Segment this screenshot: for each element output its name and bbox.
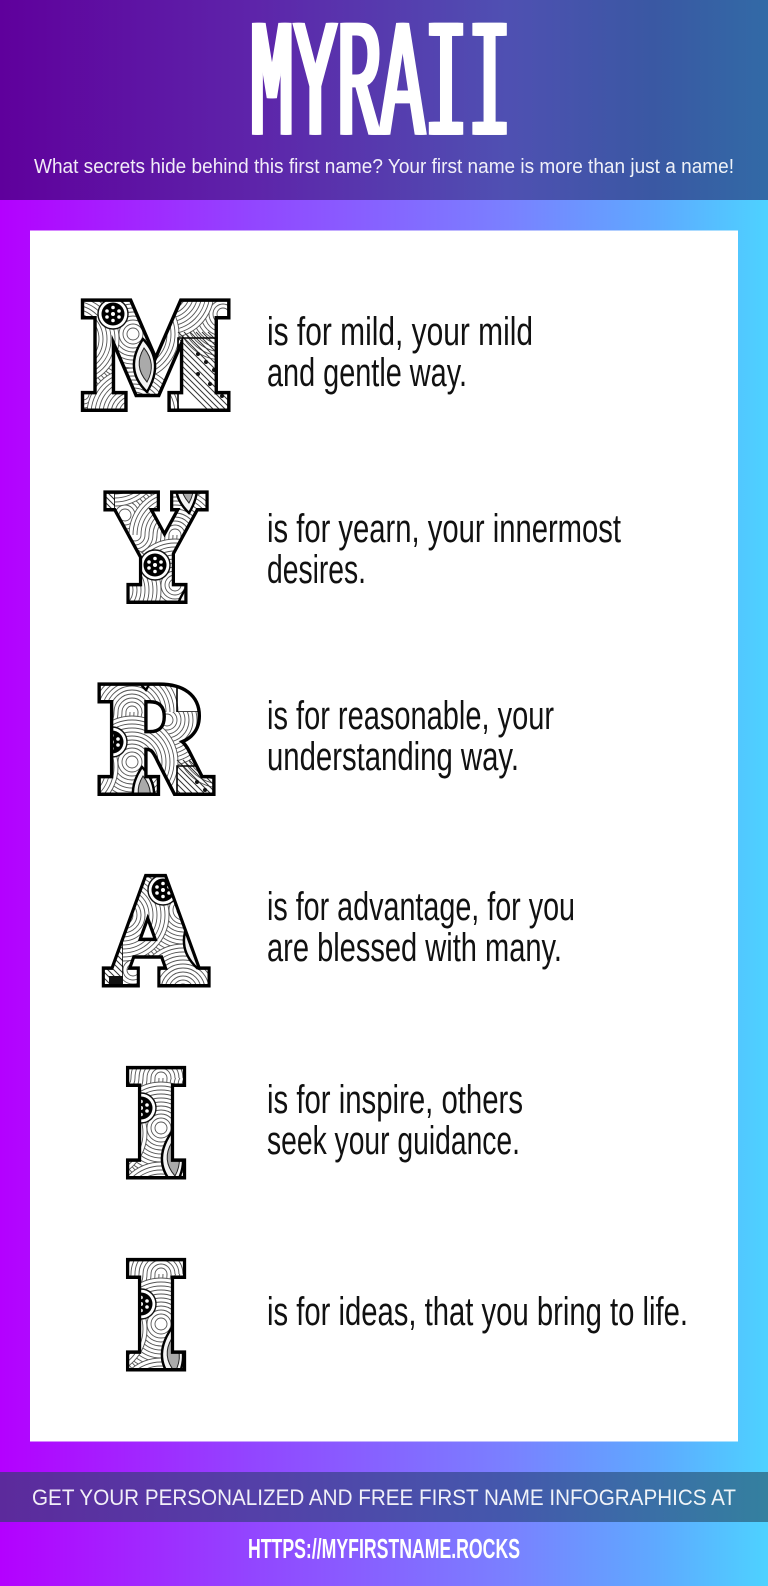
second letter I row	[126, 1235, 688, 1398]
text: R meaning: is for reasonable, your	[267, 694, 554, 738]
illustrated letter I: I	[126, 1235, 186, 1398]
footer band	[0, 1472, 768, 1522]
text: M meaning	[267, 310, 533, 395]
text: Y meaning: desires.	[267, 548, 366, 592]
text: A meaning: are blessed with many.	[267, 926, 562, 970]
illustrated letter A: A	[107, 851, 205, 1014]
illustrated letter M: M	[82, 276, 230, 438]
text: R meaning: understanding way.	[267, 735, 519, 779]
text: I meaning: is for inspire, others	[267, 1078, 523, 1122]
illustrated letter I: I	[126, 1235, 186, 1398]
illustrated letter M: M	[82, 276, 230, 438]
letter A row	[107, 851, 575, 1014]
text: I meaning: seek your guidance.	[267, 1119, 520, 1163]
white content panel	[30, 230, 738, 1442]
illustrated letter R: R	[98, 660, 210, 822]
text: I meaning	[267, 1078, 523, 1163]
illustrated letter R: R	[98, 660, 210, 822]
text: Y meaning: is for yearn, your innermost	[267, 507, 621, 551]
text: M meaning: is for mild, your mild	[267, 310, 533, 354]
header band	[0, 0, 768, 200]
text: A meaning: is for advantage, for you	[267, 885, 575, 929]
first letter I row	[126, 1043, 523, 1206]
illustrated letter Y: Y	[109, 468, 203, 630]
illustrated letter A: A	[107, 851, 205, 1014]
illustrated letter I: I	[126, 1043, 186, 1206]
letter Y row	[109, 468, 621, 630]
text: A meaning	[267, 885, 575, 970]
letter R row	[98, 660, 554, 822]
text: M meaning: and gentle way.	[267, 351, 467, 395]
text: Y meaning	[267, 507, 621, 592]
header subtitle: What secrets hide behind this first name? Your first name is more than just a name!	[34, 156, 734, 178]
letter M row	[82, 276, 533, 438]
illustrated letter Y: Y	[109, 468, 203, 630]
text: R meaning	[267, 694, 554, 779]
footer url: HTTPS://MYFIRSTNAME.ROCKS	[248, 1533, 520, 1564]
illustrated letter I: I	[126, 1043, 186, 1206]
footer call to action: GET YOUR PERSONALIZED AND FREE FIRST NAME INFOGRAPHICS AT	[32, 1485, 736, 1510]
